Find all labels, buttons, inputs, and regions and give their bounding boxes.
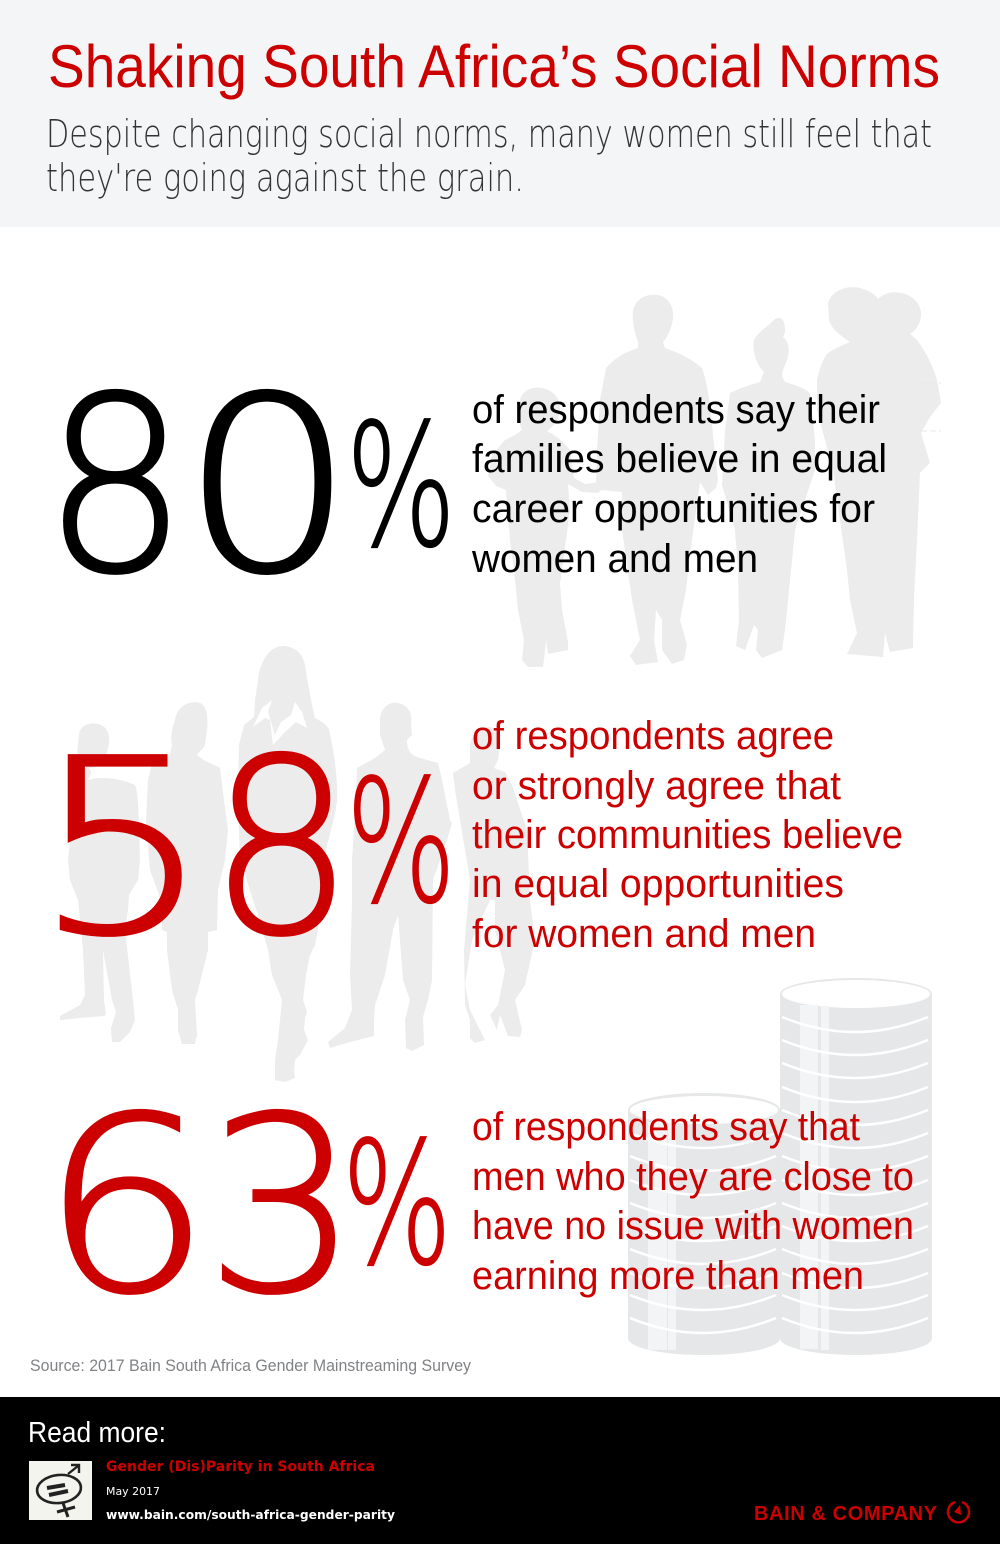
right coin stack: [780, 978, 932, 1355]
left coin stack: [628, 1093, 780, 1355]
panel: footer: [0, 1397, 1000, 1544]
boy: [488, 388, 604, 667]
statement: have no issue with women: [472, 1204, 914, 1248]
icon: coin stacks: [628, 978, 932, 1355]
statement: women and men: [471, 537, 758, 581]
big number 80: 8: [43, 346, 188, 628]
icon: family silhouette: [488, 287, 941, 667]
subtitle: [46, 112, 932, 200]
report url: www.bain.com/south-africa-gender-parity: [106, 1507, 395, 1522]
panel: header: [0, 0, 1000, 227]
woman in centre: [238, 646, 337, 1082]
person 1: [60, 723, 140, 1042]
subtitle: they're going against the grain.: [46, 156, 524, 200]
icon: gender equality thumbnail: [29, 1461, 92, 1520]
white collar: [253, 700, 307, 745]
statement: [472, 714, 903, 956]
father holding child: [817, 287, 941, 657]
statement: [472, 1105, 914, 1298]
statement: or strongly agree that: [472, 764, 841, 808]
person 5: [453, 727, 535, 1043]
person 4: [328, 703, 452, 1051]
stat: 63 percent: [40, 1066, 914, 1348]
statement: for women and men: [472, 912, 816, 956]
statement: of respondents agree: [472, 714, 834, 758]
statement: families believe in equal: [472, 437, 887, 481]
girl: [722, 318, 815, 658]
read more heading: Read more:: [28, 1417, 166, 1449]
percent sign: %: [346, 388, 456, 586]
report title: Gender (Dis)Parity in South Africa: [106, 1459, 375, 1475]
big number 63: 6: [40, 1066, 212, 1348]
icon: logo clock: [948, 1502, 969, 1522]
faint guide marks: [921, 383, 941, 431]
stat: 58 percent: 8: [209, 708, 354, 990]
mother: [596, 295, 718, 665]
statement: their communities believe: [472, 813, 903, 857]
statement: of respondents say that: [472, 1105, 860, 1149]
logo: Bain and Company: BAIN & COMPANY: [754, 1503, 938, 1525]
source note: Source: 2017 Bain South Africa Gender Mainstreaming Survey: [30, 1356, 471, 1375]
report date: May 2017: [106, 1485, 160, 1498]
statement: of respondents say their: [472, 388, 880, 432]
statement: [471, 388, 887, 581]
title: Shaking South Africa’s Social Norms: [48, 33, 940, 100]
statement: men who they are close to: [472, 1155, 914, 1199]
big number 58: 5: [34, 708, 211, 990]
stat: 80 percent: [43, 346, 887, 628]
statement: in equal opportunities: [472, 862, 844, 906]
stat: 63 percent: 3: [205, 1066, 359, 1348]
percent sign: %: [346, 744, 456, 942]
statement: earning more than men: [472, 1254, 864, 1298]
stat: 58 percent: [34, 708, 903, 990]
icon: business people silhouettes: [60, 646, 535, 1082]
stat: 80 percent: 0: [181, 346, 355, 628]
percent sign: %: [342, 1106, 452, 1304]
statement: career opportunities for: [472, 487, 875, 531]
person 2: [146, 702, 228, 1044]
